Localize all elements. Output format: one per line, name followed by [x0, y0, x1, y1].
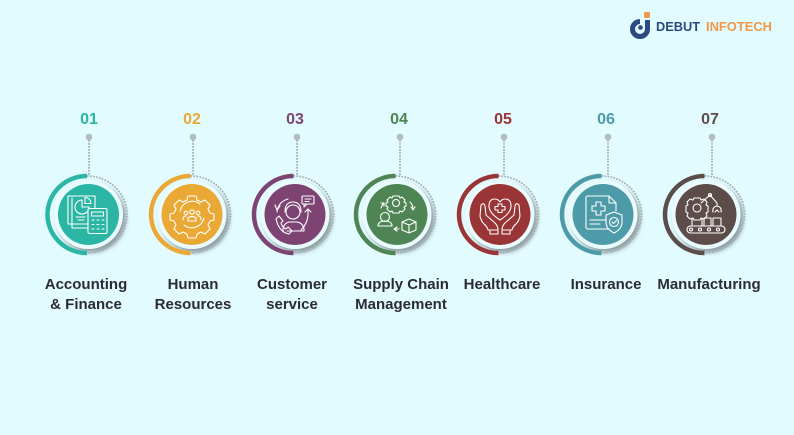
item 03 [254, 111, 334, 253]
icon: customer service [275, 196, 314, 234]
label: Customer service: service [266, 296, 318, 313]
logo: INFOTECH [706, 20, 772, 34]
icon: healthcare hands [480, 199, 520, 234]
label: Human Resources: Human [168, 276, 218, 293]
label: Accounting & Finance: & Finance [50, 296, 122, 313]
icon: gear with people [170, 196, 214, 238]
item 01: 01 [80, 111, 98, 128]
item 01 [48, 111, 127, 253]
logo: DEBUT [656, 20, 700, 34]
logo [632, 12, 772, 36]
icon: supply chain [378, 196, 416, 233]
label: Accounting & Finance: Accounting [45, 276, 127, 293]
label: Supply Chain Management: Management [355, 296, 447, 313]
label: Customer service: Customer [257, 276, 327, 293]
item 02 [151, 111, 231, 253]
icon: manufacturing robot [686, 194, 725, 233]
item 04: 04 [390, 111, 408, 128]
item 02: 02 [183, 111, 201, 128]
label: Insurance: Insurance [571, 276, 641, 293]
item 06: 06 [597, 111, 615, 128]
item 05: 05 [494, 111, 512, 128]
label: Human Resources: Resources [155, 296, 231, 313]
item 04 [356, 111, 436, 253]
label: Healthcare: Healthcare [464, 276, 540, 293]
icon: insurance document [586, 196, 622, 233]
item 07 [665, 111, 745, 253]
item 03: 03 [286, 111, 304, 128]
label: Manufacturing: Manufacturing [657, 276, 761, 293]
item 06 [562, 111, 642, 253]
icon: accounting [68, 196, 107, 234]
label: Supply Chain Management: Supply Chain [353, 276, 449, 293]
item 07: 07 [701, 111, 719, 128]
item 05 [459, 111, 538, 253]
